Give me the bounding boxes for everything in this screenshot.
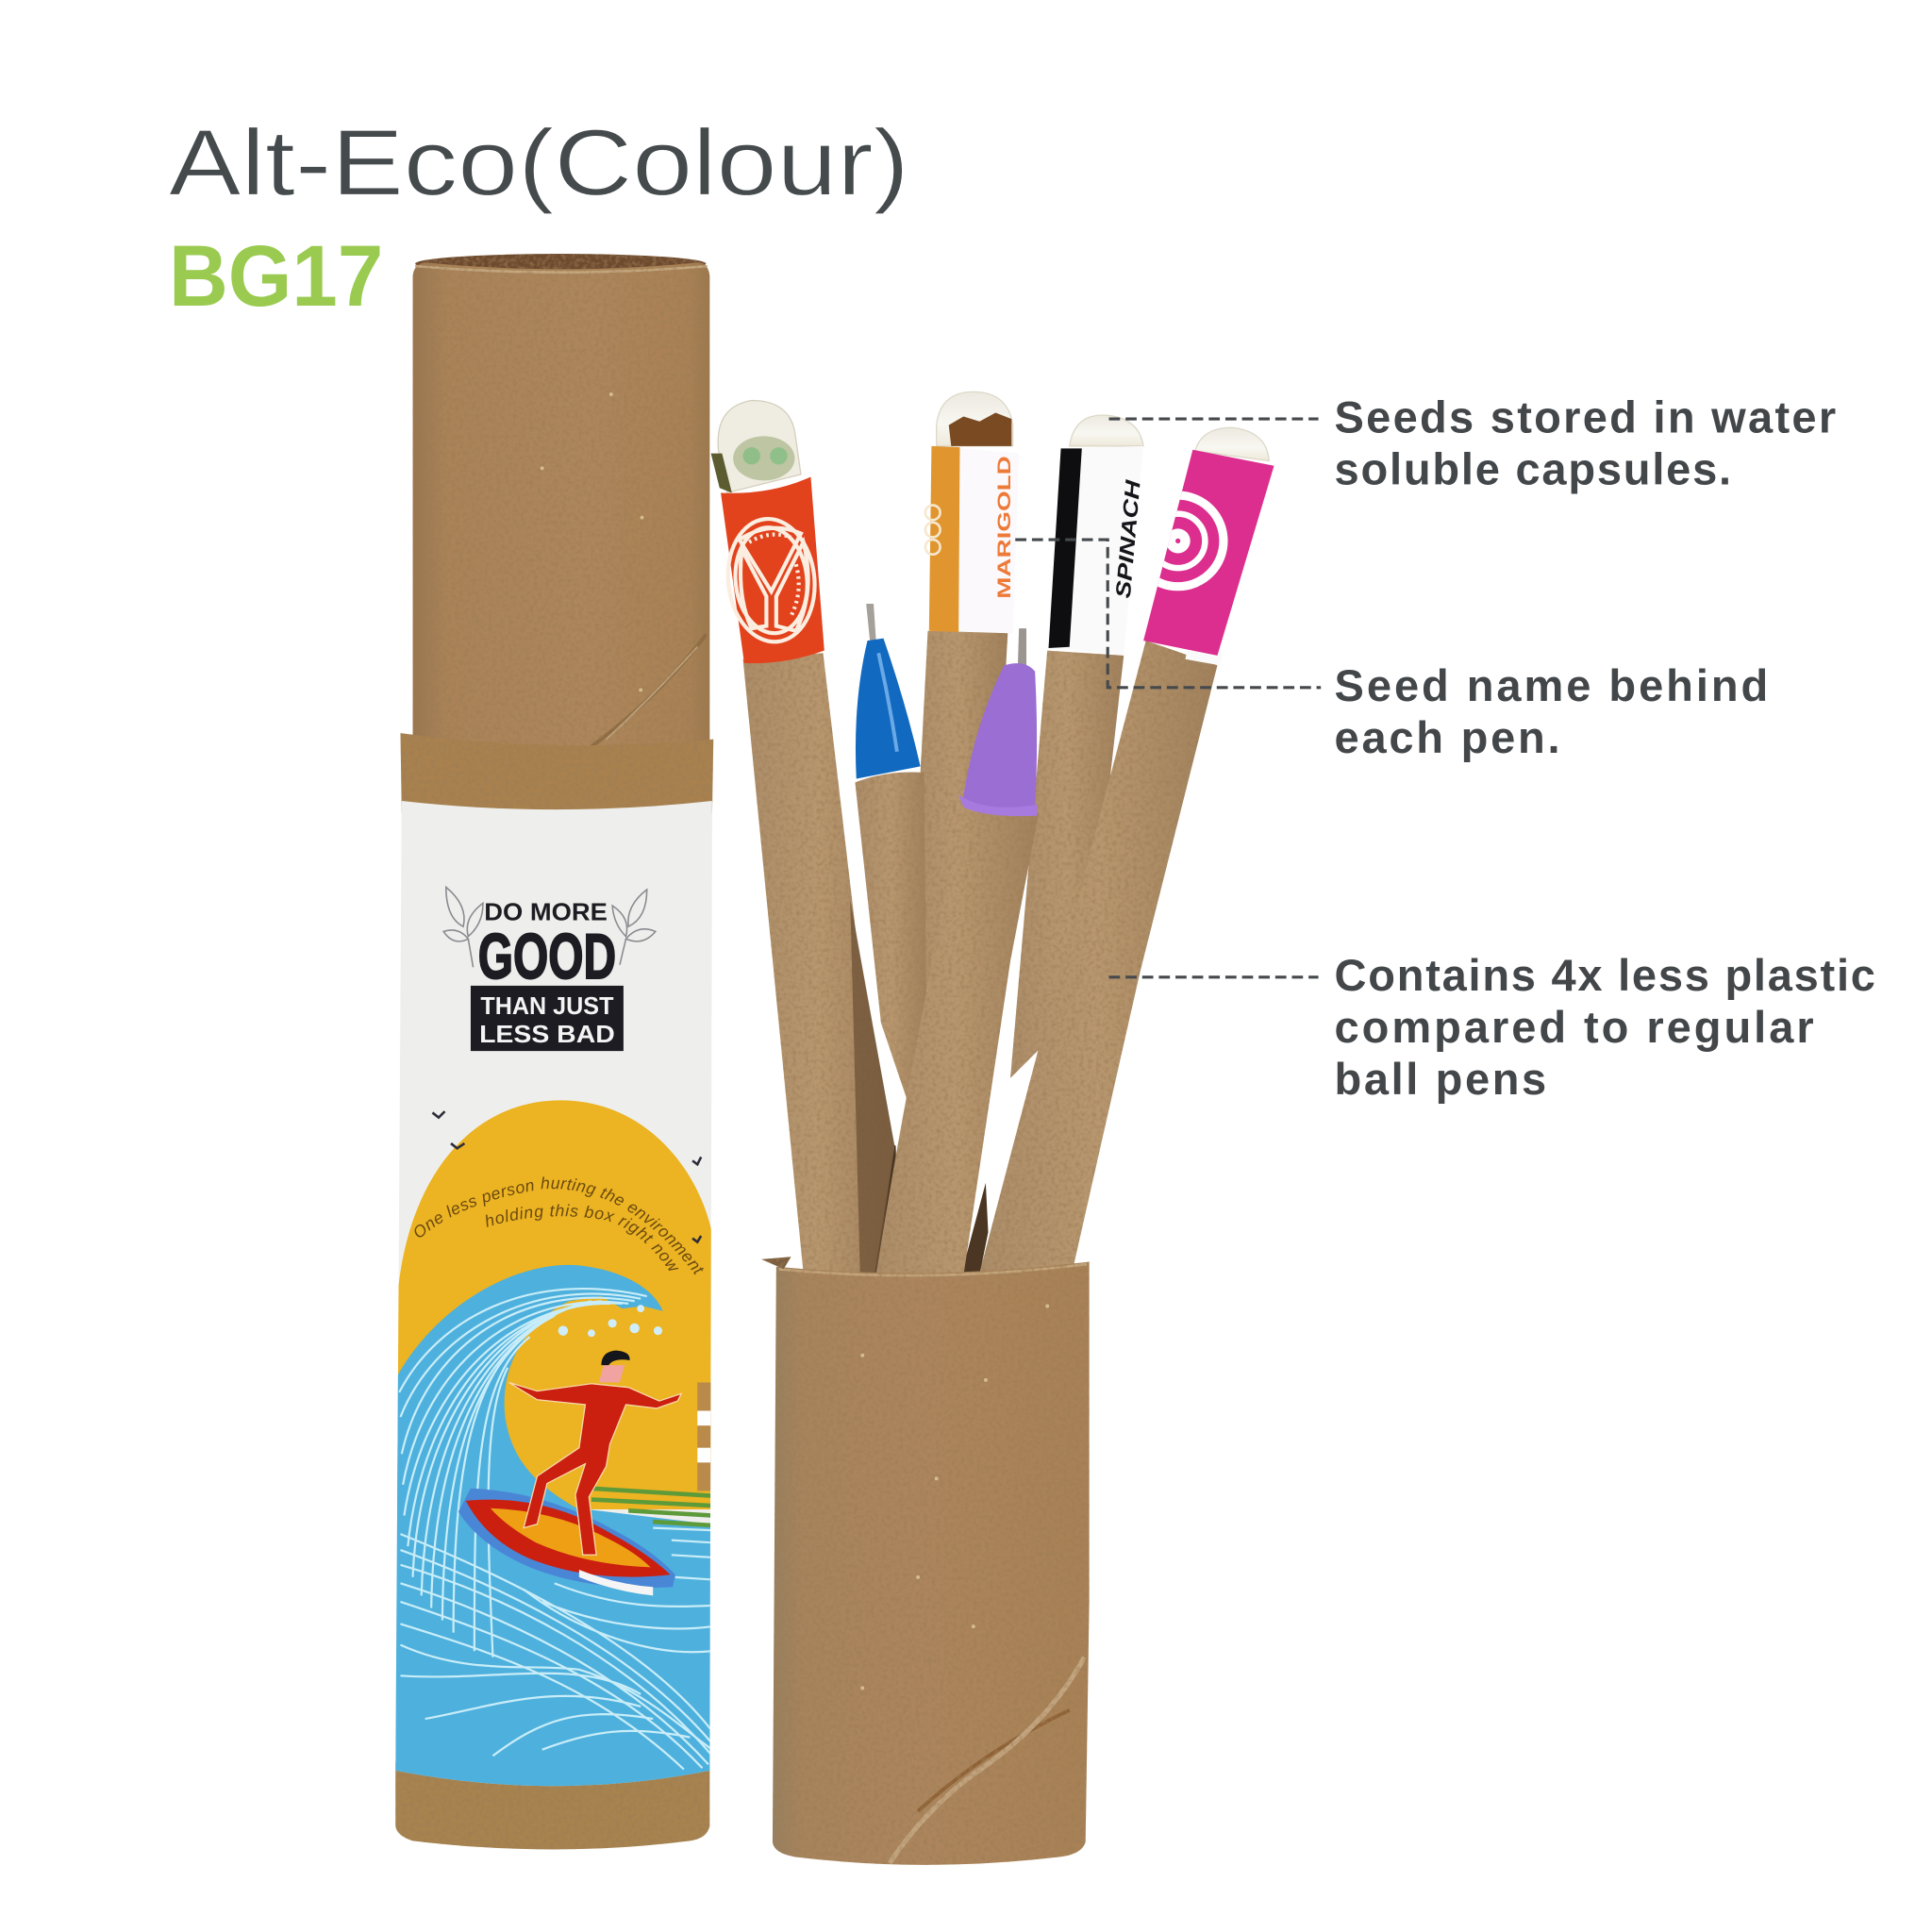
tube base — [395, 1762, 709, 1849]
label heading — [478, 898, 616, 992]
nib — [1018, 628, 1026, 668]
blue cap — [856, 639, 921, 778]
surfer — [508, 1351, 681, 1555]
pen: pink — [979, 427, 1274, 1273]
sleeve — [1047, 446, 1143, 656]
callout: seeds: Seeds stored in water — [1335, 391, 1836, 441]
curved slogan: holding this box right now — [486, 1204, 679, 1271]
shaft — [979, 641, 1217, 1273]
capsule — [718, 400, 801, 492]
shadow between pens — [850, 1109, 989, 1275]
shaft — [743, 653, 894, 1273]
yellow sun — [397, 1100, 715, 1509]
curved slogan: One less person hurting the environment — [415, 1176, 704, 1275]
seeds inside capsule — [711, 436, 794, 492]
nib — [866, 604, 876, 641]
label tagline box: LESS BAD — [479, 1020, 615, 1048]
callout: seed name: Seed name behind — [1335, 660, 1768, 710]
shaft — [855, 773, 926, 1103]
title: Alt-Eco(Colour) — [169, 110, 909, 215]
logo — [722, 514, 821, 646]
capsule — [1195, 427, 1269, 460]
white tab — [1185, 647, 1223, 665]
callout: seeds: soluble capsules. — [1335, 443, 1731, 493]
water drops — [558, 1305, 662, 1337]
wrap label artwork — [395, 801, 712, 1787]
tube collar — [400, 733, 713, 813]
callout: plastic: compared to regular — [1335, 1002, 1814, 1052]
paper speckles — [541, 392, 1049, 1690]
leaf sprigs — [443, 887, 656, 967]
shaft — [1010, 651, 1124, 1078]
callout: plastic: ball pens — [1335, 1054, 1546, 1104]
shaft — [909, 631, 1008, 1023]
tube lid — [413, 254, 709, 752]
band pattern — [925, 506, 941, 555]
seeds — [949, 413, 1011, 446]
callout: seed name: each pen. — [1335, 712, 1560, 762]
shaft — [876, 804, 1039, 1275]
callout: seeds — [1335, 391, 1836, 493]
pen: red — [711, 400, 894, 1273]
capsule — [937, 391, 1013, 446]
pen: purple refill — [876, 628, 1039, 1275]
callout: seed name — [1335, 660, 1768, 762]
spiral seam — [918, 1710, 1070, 1811]
wave and sea — [388, 1265, 721, 1811]
seed name: SPINACH — [1111, 478, 1145, 599]
purple cap — [962, 663, 1037, 810]
label heading: DO MORE — [484, 898, 608, 926]
kraft tube with label — [395, 254, 758, 1849]
red sleeve — [721, 476, 824, 663]
lighthouse — [697, 1382, 712, 1491]
target mark — [1158, 491, 1228, 591]
pen holder cup — [761, 1257, 1090, 1865]
label heading: GOOD — [478, 922, 616, 992]
product code: BG17 — [169, 228, 383, 325]
wave lines — [399, 1289, 712, 1770]
callout lines — [1015, 419, 1321, 977]
label tagline box: THAN JUST — [480, 991, 613, 1020]
label tagline box — [471, 986, 624, 1051]
birds — [432, 1111, 701, 1242]
pen: spinach — [1010, 415, 1145, 1078]
pink sleeve — [1143, 450, 1274, 656]
surfboard — [458, 1489, 675, 1595]
pen: blue refill — [855, 604, 926, 1103]
pen: marigold — [909, 391, 1019, 1023]
horizon stripes — [591, 1489, 712, 1525]
seed name: MARIGOLD — [994, 456, 1015, 599]
sleeve — [929, 446, 1019, 633]
capsule — [1070, 415, 1143, 446]
callout: plastic: Contains 4x less plastic — [1335, 950, 1875, 1000]
callout: plastic — [1335, 950, 1875, 1104]
